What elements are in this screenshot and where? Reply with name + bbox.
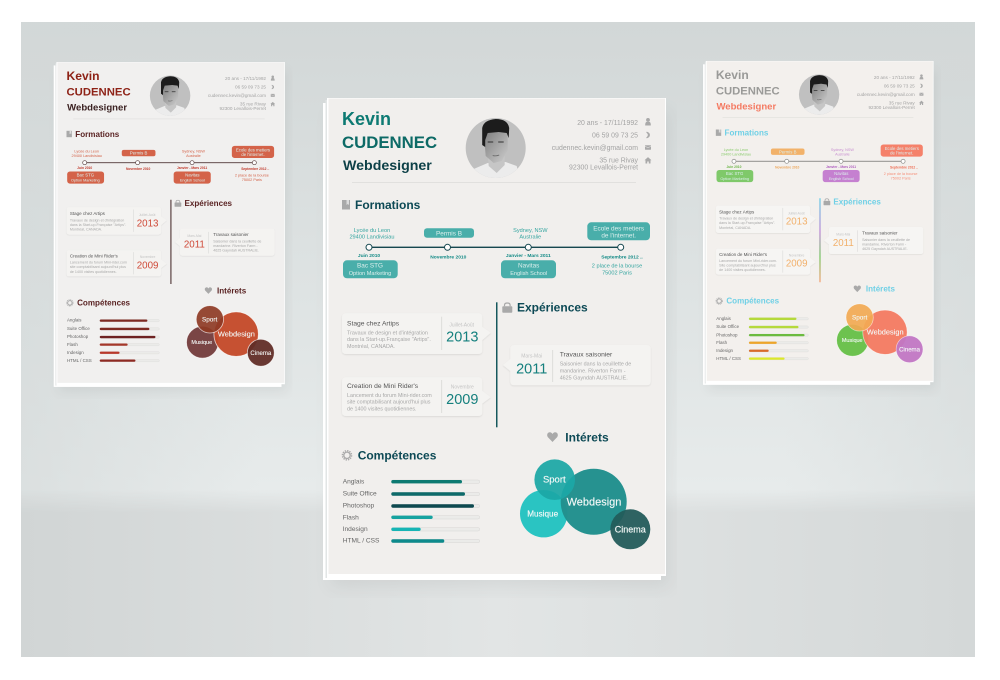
name block (342, 109, 437, 174)
timeline: education: Lycée du Leon (354, 228, 390, 234)
skill bars (716, 316, 808, 361)
bubble chart: interests: Webdesign (567, 496, 621, 508)
card: Creation de Mini Rider's: Creation de Mini Rider's (347, 383, 419, 390)
card: Stage chez Artips: Juillet-Août (139, 213, 156, 217)
skill bars: Photoshop (716, 332, 738, 337)
card: Stage chez Artips: Juillet-Août (449, 322, 475, 328)
card: Stage chez Artips: 2013 (446, 330, 478, 346)
timeline: education: English School (180, 178, 205, 182)
timeline: education: Sydney, NSW (182, 149, 205, 153)
timeline: education: 75002 Paris (602, 271, 632, 277)
card: Travaux saisonier: Saisonier dans la ceuillette de (213, 239, 261, 243)
skill bars: Flash (716, 340, 728, 345)
card: Stage chez Artips: dans la Start-up.Française "Artips". (719, 221, 775, 225)
timeline: education: de l'internet. (601, 232, 636, 240)
card: Stage chez Artips (67, 207, 167, 235)
card: Creation de Mini Rider's: Site comptabilisant aujourd'hui plus (719, 263, 776, 267)
timeline: education: Septembre 2012 .. (601, 254, 643, 260)
timeline: education: 2 place de la bourse (884, 172, 918, 176)
timeline: education: English School (510, 271, 547, 277)
skill bars: Suite Office (67, 326, 90, 331)
heading: Compétences: Compétences (358, 448, 437, 462)
timeline: education: Bac STG (77, 172, 95, 177)
name block: Kevin (67, 69, 100, 83)
timeline: education: Juin 2010 (77, 166, 92, 170)
name block: Kevin (716, 68, 749, 82)
card: Stage chez Artips: Stage chez Artips (347, 320, 400, 327)
timeline: education: 29400 Landivisiau (72, 154, 102, 158)
card: Stage chez Artips (342, 313, 491, 354)
timeline: education: 75002 Paris (242, 178, 262, 182)
skill bars (343, 478, 480, 545)
name block: Webdesigner (67, 103, 127, 114)
heading: Formations: Formations (75, 130, 120, 139)
timeline: education: English School (829, 177, 854, 181)
timeline: education: de l'internet. (241, 152, 265, 157)
bubble chart: interests: Sport (543, 475, 566, 486)
name block (716, 68, 780, 112)
panel: left CV, red theme (54, 62, 288, 392)
skill bars: HTML / CSS (716, 356, 741, 361)
contact details: 20 ans - 17/11/1992 (225, 76, 266, 81)
name block: Webdesigner (716, 101, 776, 112)
card: Creation de Mini Rider's (67, 250, 167, 276)
panel: right CV, pastel theme (703, 61, 936, 390)
bubble chart: interests (837, 304, 923, 363)
card: Stage chez Artips: Stage chez Artips (719, 210, 755, 215)
contact details: 06 59 09 73 25 (884, 84, 915, 89)
heading: Expériences: Expériences (184, 199, 233, 208)
contact details: 06 59 09 73 25 (592, 132, 638, 140)
card: Creation de Mini Rider's (342, 377, 491, 416)
timeline: education: Janvier - Mars 2011 (506, 253, 551, 259)
timeline: education: Option Marketing (349, 271, 391, 277)
bubble chart: interests: Cinema (615, 524, 646, 534)
timeline: education: Permis B (436, 230, 462, 238)
heading: Intérets (854, 285, 895, 294)
timeline: education: Lycée du Leon (724, 148, 748, 152)
card: Travaux saisonier: mandarine. Riverton Farm - (862, 242, 907, 246)
card: Creation de Mini Rider's: Novembre (451, 385, 474, 391)
timeline: education: Option Marketing (720, 177, 749, 181)
timeline: education: Permis B (779, 149, 797, 154)
card: Creation de Mini Rider's: 2009 (446, 392, 478, 408)
card: Creation de Mini Rider's: site comptabilisant aujourd'hui plus (347, 400, 431, 406)
timeline: education: Novembre 2010 (775, 166, 800, 170)
skill bars (67, 318, 159, 363)
card: Travaux saisonier: Mars-Mai (836, 232, 851, 236)
timeline: education: Australie (186, 154, 201, 158)
heading: Intérets: Intérets (866, 285, 895, 294)
timeline: education (716, 144, 923, 182)
timeline: education: Septembre 2012 .. (241, 167, 269, 171)
name block: CUDENNEC (67, 87, 131, 99)
timeline: education: Janvier - Mars 2011 (826, 165, 856, 169)
skill bars: Indesign (67, 350, 84, 355)
bubble chart: interests: Webdesign (218, 330, 255, 339)
timeline: education: 2 place de la bourse (235, 173, 269, 177)
timeline: education: de l'internet. (890, 151, 913, 156)
timeline: education: Sydney, NSW (831, 148, 854, 152)
card: Stage chez Artips: 2013 (786, 217, 807, 228)
skill bars: Photoshop (343, 503, 375, 510)
card: Travaux saisonier: mandarine. Riverton Farm - (560, 368, 626, 374)
heading: Compétences: Compétences (77, 299, 131, 308)
name block (67, 69, 131, 114)
contact details: cudennec.kevin@gmail.com (857, 92, 915, 97)
timeline: education: Navitas (518, 262, 539, 270)
bubble chart: interests: Cinema (250, 351, 272, 357)
bubble chart: interests: Cinema (899, 347, 921, 353)
card: Travaux saisonier: Mars-Mai (521, 354, 542, 360)
card: Creation de Mini Rider's: 2009 (786, 259, 807, 270)
card: Travaux saisonier: 2011 (516, 361, 547, 377)
contact details: 92300 Levallois-Perret (220, 106, 267, 111)
skill bars: Flash (67, 342, 78, 347)
portrait photo (466, 118, 526, 178)
skill bars: Photoshop (67, 334, 89, 339)
timeline: education: Australie (519, 235, 541, 241)
card: Travaux saisonier: 4625 Gayndah AUSTRALIE. (560, 375, 628, 381)
timeline: education: 75002 Paris (891, 177, 911, 181)
heading: Intérets (205, 286, 247, 295)
card: Creation de Mini Rider's: Lancement du forum Mini-rider.com. (719, 259, 777, 263)
name block: Kevin (342, 109, 391, 129)
card: Travaux saisonier (175, 229, 275, 256)
timeline: education: 2 place de la bourse (592, 264, 642, 270)
timeline: education: Sydney, NSW (513, 228, 548, 234)
card: Creation de Mini Rider's: de 1400 visites quotidiennes. (719, 268, 766, 272)
timeline: education: Option Marketing (71, 178, 100, 182)
card: Travaux saisonier: mandarine. Riverton Farm - (213, 244, 258, 248)
card: Stage chez Artips: Juillet-Août (788, 211, 805, 215)
contact details: 35 rue Rivay (889, 100, 915, 105)
card: Stage chez Artips: Montréal, CANADA. (347, 344, 395, 350)
portrait photo (150, 76, 190, 116)
card: Creation de Mini Rider's: Novembre (789, 253, 805, 257)
timeline: education: Ecole des metiers (236, 147, 270, 152)
timeline: education: Navitas (834, 171, 848, 176)
heading: Formations: Formations (355, 198, 421, 212)
heading: Intérets: Intérets (217, 286, 247, 295)
skill bars: Suite Office (716, 324, 740, 329)
timeline: education (343, 222, 650, 278)
card: Stage chez Artips: Travaux de design et d'intégration (719, 217, 773, 221)
card: Creation de Mini Rider's: Creation de Mini Rider's (719, 252, 768, 257)
card: Travaux saisonier (503, 345, 651, 385)
timeline: education: Ecole des metiers (885, 146, 919, 151)
card: Travaux saisonier (824, 227, 923, 254)
bubble chart: interests: Webdesign (867, 328, 904, 337)
card: Travaux saisonier: 2011 (184, 240, 205, 251)
bubble chart: interests: Musique (842, 338, 863, 344)
card: Travaux saisonier: Saisonier dans la ceuillette de (862, 238, 910, 242)
contact details: 20 ans - 17/11/1992 (874, 75, 915, 80)
name block: CUDENNEC (342, 133, 437, 152)
timeline: education: Novembre 2010 (430, 254, 467, 260)
contact details (857, 74, 924, 110)
bubble chart: interests: Sport (202, 316, 217, 323)
bubble chart: interests: Sport (852, 314, 867, 321)
card: Stage chez Artips: 2013 (137, 218, 158, 229)
card: Creation de Mini Rider's: Lancement du forum Mini-rider.com (347, 393, 432, 399)
card: Creation de Mini Rider's: de 1400 visites quotidiennes. (70, 270, 117, 274)
card: Creation de Mini Rider's (716, 249, 816, 275)
skill bars: Indesign (716, 348, 734, 353)
card: Travaux saisonier: Travaux saisonier (862, 231, 898, 236)
heading: Expériences: Expériences (833, 198, 881, 207)
contact details: 06 59 09 73 25 (235, 85, 266, 90)
card: Travaux saisonier: 4625 Gayndah AUSTRALIE. (862, 247, 908, 251)
card: Travaux saisonier: Travaux saisonier (560, 351, 613, 358)
timeline: education: Juin 2010 (358, 253, 380, 259)
contact details: 20 ans - 17/11/1992 (577, 120, 638, 127)
timeline: education: Australie (835, 153, 850, 157)
bubble chart: interests (186, 306, 274, 366)
card: Stage chez Artips: Travaux de design et d'intégration (70, 218, 124, 222)
card: Stage chez Artips: Stage chez Artips (70, 211, 106, 216)
timeline: education: Ecole des metiers (593, 226, 644, 232)
card: Stage chez Artips: dans la Start-up.Française "Artips". (347, 337, 431, 343)
card: Travaux saisonier: 2011 (833, 238, 854, 249)
timeline: education: Novembre 2010 (126, 167, 151, 171)
panel: center CV, teal theme (323, 98, 670, 588)
card: Travaux saisonier: Mars-Mai (187, 234, 202, 238)
contact details (208, 76, 275, 111)
card: Travaux saisonier: 4625 Gayndah AUSTRALIE. (213, 249, 259, 253)
contact details: cudennec.kevin@gmail.com (208, 93, 266, 98)
contact details: 92300 Levallois-Perret (569, 164, 638, 172)
timeline: education: Janvier - Mars 2011 (177, 166, 207, 170)
card: Creation de Mini Rider's: de 1400 visites quotidiennes. (347, 407, 417, 413)
contact details: 35 rue Rivay (599, 158, 639, 165)
card: Creation de Mini Rider's: 2009 (137, 260, 158, 271)
skill bars: Anglais (343, 478, 365, 485)
card: Travaux saisonier: Saisonier dans la ceuillette de (560, 362, 631, 368)
card: Creation de Mini Rider's: Creation de Mini Rider's (70, 254, 119, 259)
heading: Expériences: Expériences (517, 301, 588, 315)
timeline: education: Navitas (185, 172, 200, 177)
timeline: education: Lycée du Leon (74, 149, 99, 153)
name block: Webdesigner (343, 158, 432, 174)
card: Stage chez Artips: dans la Start-up.Française "Artips". (70, 223, 126, 227)
bubble chart: interests (520, 459, 650, 549)
timeline: education: Juin 2010 (726, 165, 742, 169)
card: Stage chez Artips: Montréal, CANADA. (719, 226, 751, 230)
card: Creation de Mini Rider's: Lancement du forum Mini-rider.com (70, 261, 127, 265)
timeline: education: Bac STG (357, 262, 383, 270)
skill bars: HTML / CSS (343, 538, 380, 545)
skill bars: Indesign (343, 526, 368, 533)
skill bars: Anglais (716, 316, 732, 321)
heading: Compétences: Compétences (726, 297, 780, 306)
timeline: education: Permis B (130, 151, 147, 156)
card: Stage chez Artips (716, 206, 816, 233)
name block: CUDENNEC (716, 86, 780, 98)
contact details: cudennec.kevin@gmail.com (552, 145, 638, 152)
bubble chart: interests: Musique (191, 340, 212, 346)
skill bars: Anglais (67, 318, 82, 323)
timeline: education: 29400 Landivisiau (349, 235, 395, 241)
timeline: education: Septembre 2012 .. (890, 166, 918, 170)
contact details (552, 118, 652, 172)
timeline: education (67, 146, 274, 184)
skill bars: Suite Office (343, 491, 377, 498)
portrait photo (799, 74, 839, 115)
contact details: 35 rue Rivay (240, 102, 267, 107)
skill bars: Flash (343, 514, 359, 521)
timeline: education: 29400 Landivisiau (721, 153, 751, 157)
skill bars: HTML / CSS (67, 358, 92, 363)
timeline: education: Bac STG (726, 171, 744, 176)
card: Stage chez Artips: Montréal, CANADA. (70, 228, 102, 232)
bubble chart: interests: Musique (527, 509, 559, 518)
card: Creation de Mini Rider's: Novembre (140, 255, 155, 259)
card: Stage chez Artips: Travaux de design et d'intégration (347, 330, 428, 336)
card: Travaux saisonier: Travaux saisonier (213, 232, 249, 237)
card: Creation de Mini Rider's: site comptabilisant aujourd'hui plus (70, 265, 126, 269)
heading: Intérets: Intérets (565, 430, 609, 444)
contact details: 92300 Levallois-Perret (868, 105, 915, 110)
heading: Formations: Formations (725, 129, 769, 138)
